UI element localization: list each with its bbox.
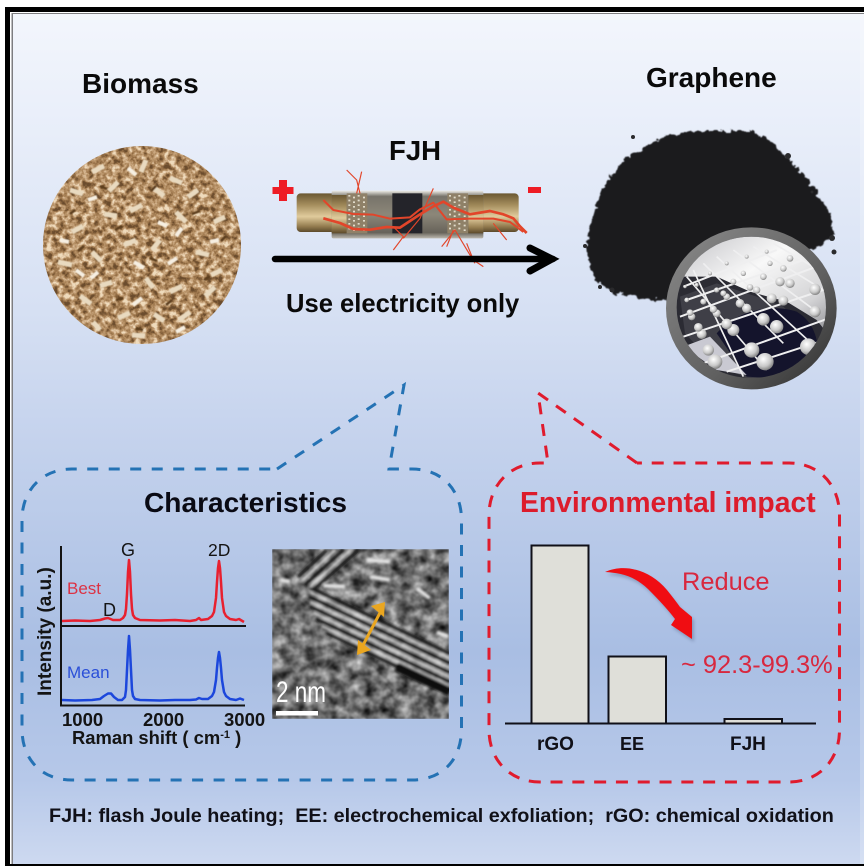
- callout bubble: environmental impact outline: [489, 393, 840, 782]
- Raman spectra chart: [35, 540, 265, 748]
- scale bar: [276, 711, 318, 716]
- bar FJH: [724, 719, 782, 724]
- process arrow: [275, 248, 553, 271]
- heading: Environmental impact: Environmental impact: [520, 486, 816, 518]
- axes: [60, 546, 246, 706]
- x axis title: -1: [220, 729, 230, 741]
- bar EE: [608, 656, 666, 724]
- Mean spectrum (blue): [62, 636, 244, 700]
- label FJH: FJH: [730, 734, 766, 755]
- footnote: FJH: flash Joule heating; EE: electrochemical exfoliation; rGO: chemical oxidation: [49, 805, 834, 827]
- series label Mean: Mean: [67, 663, 110, 682]
- tick label 1000: 1000: [62, 709, 103, 730]
- peak label 2D: 2D: [208, 540, 230, 560]
- caption: Use electricity only: Use electricity only: [286, 290, 520, 318]
- series label Best: Best: [67, 579, 101, 598]
- x axis title: Raman shift ( cm: [72, 727, 220, 748]
- plus terminal: [272, 180, 294, 201]
- heading: Biomass: Biomass: [82, 68, 199, 99]
- thickness arrow: [357, 602, 385, 655]
- baseline: [505, 722, 816, 724]
- label: FJH: FJH: [389, 135, 441, 166]
- y axis title: Intensity (a.u.): [35, 567, 56, 696]
- graphene lattice inset: [666, 227, 837, 390]
- tick label 3000: 3000: [224, 709, 265, 730]
- bar chart: [505, 546, 816, 755]
- heading: Characteristics: Characteristics: [144, 487, 347, 518]
- x axis title: ): [230, 727, 241, 748]
- scale bar label: 2 nm: [276, 676, 326, 709]
- label rGO: rGO: [537, 734, 574, 755]
- biomass photo disc: [43, 146, 241, 344]
- tick label 2000: 2000: [143, 709, 184, 730]
- callout bubble: characteristics outline: [22, 385, 462, 780]
- reduction arrow: [605, 568, 694, 642]
- peak label D: D: [103, 600, 116, 620]
- Best spectrum (red): [62, 560, 244, 622]
- peak label G: G: [121, 540, 135, 560]
- minus terminal: [528, 187, 541, 193]
- heading: Graphene: Graphene: [646, 62, 777, 93]
- TEM micrograph: [272, 549, 450, 719]
- label: reduction percentage: ~ 92.3-99.3%: [681, 651, 833, 679]
- label: Reduce: Reduce: [682, 568, 770, 596]
- bar rGO: [532, 546, 588, 724]
- graphene powder pile: [583, 131, 836, 302]
- FJH reactor device with sparks: [297, 170, 527, 267]
- label EE: EE: [620, 734, 644, 754]
